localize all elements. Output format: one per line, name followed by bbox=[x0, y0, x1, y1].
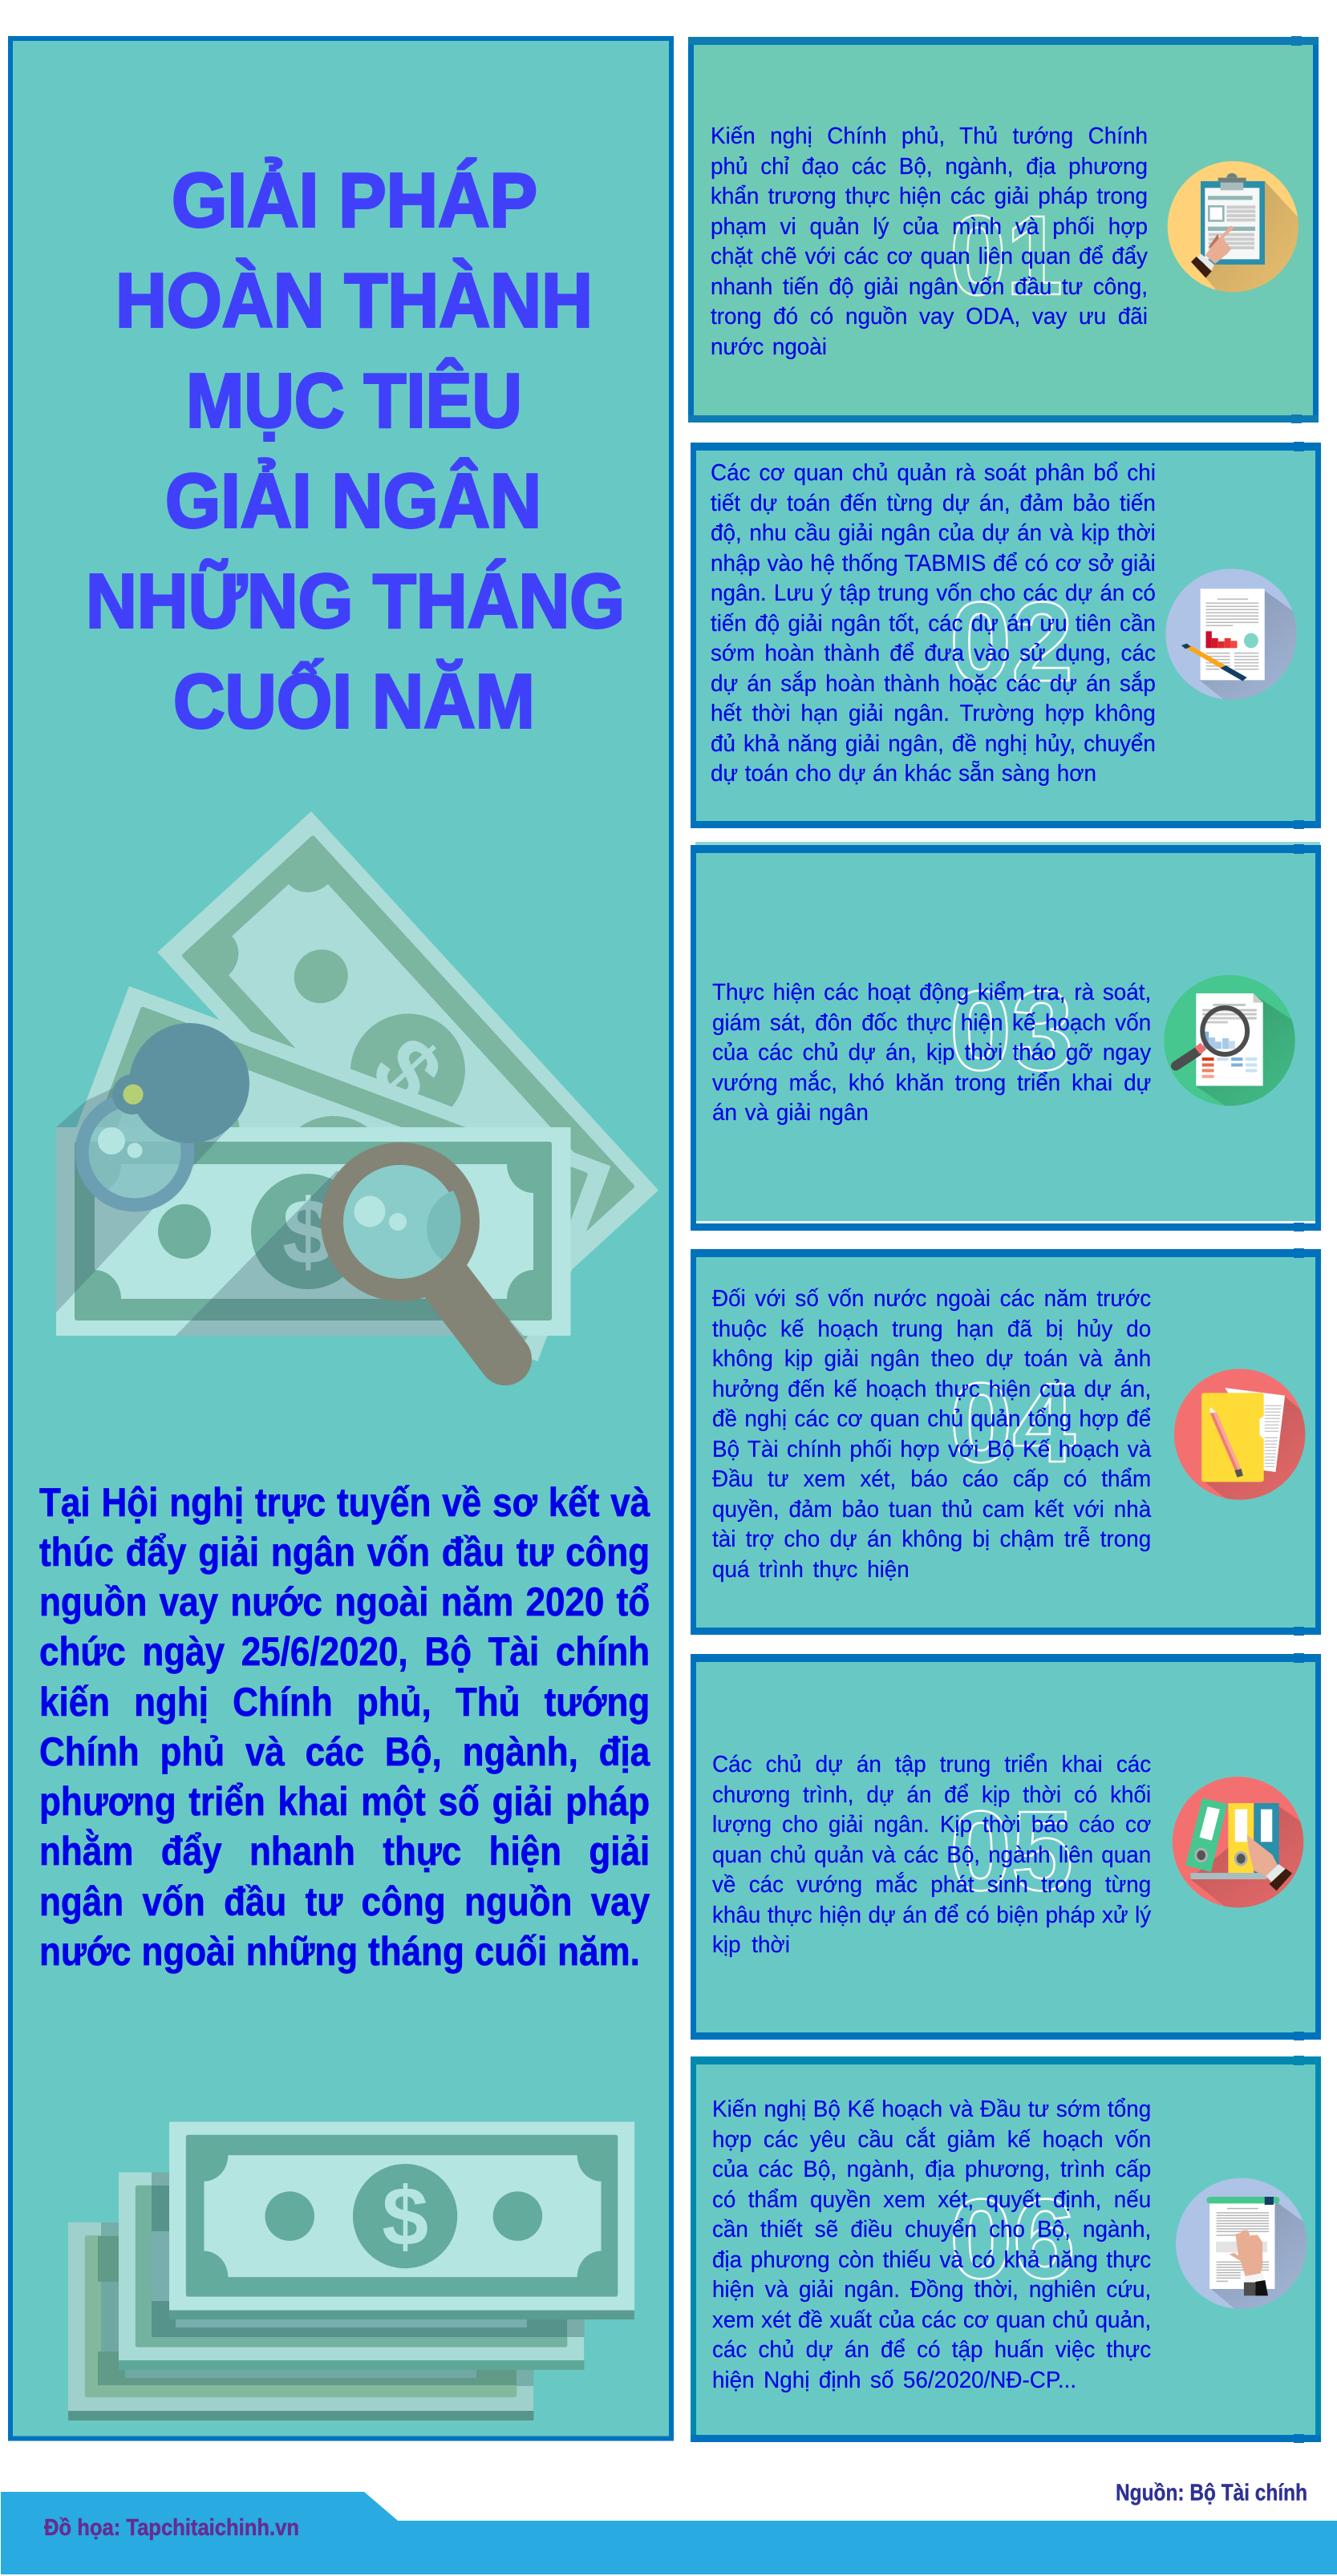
text block: intro: Tại Hội nghị trực tuyến về sơ kết và bbox=[39, 1480, 650, 1525]
panel: left column bbox=[8, 36, 674, 2441]
icon: binders on a shelf bbox=[1173, 1777, 1304, 1908]
title: CUỐI NĂM bbox=[173, 657, 535, 744]
text block: panel 01: Kiến nghị Chính phủ, Thủ tướng Chính bbox=[711, 123, 1148, 149]
banknote: rotated back bbox=[157, 811, 658, 1331]
text block: panel 05: quan chủ quản và các Bộ, ngành liên quan bbox=[712, 1842, 1151, 1868]
text block: intro: chức ngày 25/6/2020, Bộ Tài chính bbox=[39, 1629, 650, 1674]
banknote: rotated back: $ bbox=[352, 1018, 462, 1125]
text block: panel 02: nhập vào hệ thống TABMIS để có cơ sở giải bbox=[711, 550, 1156, 576]
text block: panel 03: vướng mắc, khó khăn trong triển khai dự bbox=[712, 1070, 1151, 1096]
panel: 02 bbox=[691, 442, 1337, 829]
text block: panel 01: nước ngoài bbox=[711, 334, 827, 360]
text block: intro: kiến nghị Chính phủ, Thủ tướng bbox=[39, 1680, 650, 1725]
text block: intro: nước ngoài những tháng cuối năm. bbox=[39, 1929, 640, 1974]
title: MỤC TIÊU bbox=[186, 358, 522, 444]
text block: panel 01: khẩn trương thực hiện các giải pháp trong bbox=[711, 184, 1148, 209]
banknote: rotated middle bbox=[56, 986, 610, 1361]
number 03: 03 bbox=[950, 967, 1073, 1094]
text block: panel 01: phủ chỉ đạo các Bộ, ngành, địa phương bbox=[711, 154, 1148, 180]
text block: panel 01: trong đó có nguồn vay ODA, vay ưu đãi bbox=[711, 304, 1148, 330]
text block: panel 06: hợp các yêu cầu cắt giảm kế hoạch vốn bbox=[712, 2127, 1151, 2153]
text block: panel 06 bbox=[712, 2097, 1151, 2393]
title: GIẢI NGÂN bbox=[165, 457, 541, 544]
banknote: front of stack bbox=[169, 2121, 634, 2319]
banknote: front of stack: $ bbox=[382, 2170, 428, 2263]
text block: panel 05: về các vướng mắc phát sinh trong từng bbox=[712, 1872, 1151, 1898]
text block: intro: ngân vốn đầu tư công nguồn vay bbox=[39, 1879, 650, 1924]
text block: panel 03: của các chủ dự án, kịp thời tháo gỡ ngay bbox=[712, 1040, 1151, 1066]
text block: panel 04 bbox=[712, 1286, 1152, 1583]
text block: panel 03: Thực hiện các hoạt động kiểm tra, rà soát, bbox=[712, 980, 1151, 1005]
title: NHỮNG THÁNG bbox=[86, 558, 625, 645]
number 01: 01 bbox=[950, 192, 1063, 318]
text block: panel 02: ngân. Lưu ý tập trung vốn cho các dự án có bbox=[711, 580, 1156, 606]
text block: panel 02: độ, nhu cầu giải ngân của dự án và kịp thời bbox=[711, 520, 1156, 546]
text block: intro: Chính phủ và các Bộ, ngành, địa bbox=[39, 1729, 650, 1774]
text block: intro: nhằm đẩy nhanh thực hiện giải bbox=[39, 1829, 650, 1874]
text block: panel 04: quyền, đảm bảo tuan thủ cam kết với nhà bbox=[712, 1496, 1151, 1522]
text block: panel 05: chương trình, dự án để kịp thời có khối bbox=[712, 1781, 1151, 1807]
banknote: front: $ bbox=[282, 1181, 334, 1284]
text block: panel 02 bbox=[711, 460, 1156, 787]
text block: panel 02: sớm hoàn thành để đưa vào sử dụng, các bbox=[711, 641, 1156, 666]
text block: panel 01 bbox=[711, 123, 1148, 360]
text block: intro bbox=[39, 1480, 650, 1974]
text block: panel 05: lượng cho giải ngân. Kịp thời báo cáo cơ bbox=[712, 1812, 1151, 1838]
icon: folder and pencil bbox=[1174, 1369, 1306, 1500]
text block: panel 06: có thẩm quyền xem xét, quyết định, nếu bbox=[712, 2187, 1151, 2213]
text block: panel 04: quá trình thực hiện bbox=[712, 1557, 910, 1583]
number 04: 04 bbox=[950, 1359, 1076, 1486]
panel: 03 bbox=[691, 842, 1337, 1231]
text block: panel 03: án và giải ngân bbox=[712, 1100, 869, 1126]
footer band bbox=[1, 2492, 1337, 2574]
text block: panel 03: giám sát, đôn đốc thực hiện kế hoạch vốn bbox=[712, 1010, 1151, 1036]
illustration: banknote stack bbox=[68, 2121, 634, 2420]
title bbox=[86, 157, 625, 744]
text block: panel 02: tiến độ giải ngân tốt, các dự án ưu tiên cần bbox=[711, 611, 1156, 637]
number 05: 05 bbox=[950, 1787, 1073, 1914]
banknote: back of stack bbox=[68, 2222, 534, 2420]
text block: panel 06: Kiến nghị Bộ Kế hoạch và Đầu tư sớm tổng bbox=[712, 2097, 1151, 2122]
icon: hand on document bbox=[1176, 2178, 1307, 2309]
illustration: banknotes with magnifiers bbox=[56, 811, 658, 1361]
panel: 01 bbox=[688, 36, 1337, 423]
banknote: rotated middle: $ bbox=[290, 1118, 375, 1231]
text block: panel 06: địa phương còn thiếu và có khả năng thực bbox=[712, 2247, 1151, 2273]
text block: panel 04: thuộc kế hoạch trung hạn đã bị hủy do bbox=[712, 1316, 1151, 1342]
text block: panel 04: Đối với số vốn nước ngoài các năm trước bbox=[712, 1286, 1151, 1312]
icon: small magnifier shadow bbox=[82, 1023, 249, 1205]
text block: panel 02: dự án sắp hoàn thành hoặc các dự án sắp bbox=[711, 670, 1156, 696]
text block: panel 05: Các chủ dự án tập trung triển khai các bbox=[712, 1752, 1151, 1777]
banknote: front bbox=[56, 1127, 571, 1336]
text block: intro: nguồn vay nước ngoài năm 2020 tổ bbox=[39, 1579, 650, 1624]
text block: panel 04: tài trợ cho dự án không bị chậm trễ trong bbox=[712, 1527, 1151, 1552]
text block: panel 01: nhanh tiến độ giải ngân vốn đầu tư công, bbox=[711, 274, 1148, 300]
icon: large magnifier bbox=[332, 1154, 505, 1359]
text block: panel 04: Bộ Tài chính phối hợp với Bộ Kế hoạch và bbox=[712, 1437, 1151, 1462]
text block: panel 04: hưởng đến kế hoạch thực hiện của dự án, bbox=[712, 1376, 1151, 1401]
text block: panel 01: phạm vi quản lý của mình và phối hợp bbox=[711, 214, 1148, 240]
panel: 04 bbox=[691, 1248, 1337, 1636]
icon: report and pencil bbox=[1165, 568, 1297, 700]
text block: panel 05: kịp thời bbox=[712, 1932, 790, 1958]
text block: panel 04: không kịp giải ngân theo dự toán và ảnh bbox=[712, 1346, 1151, 1372]
panel: 05 bbox=[691, 1653, 1337, 2040]
text block: panel 06: cần thiết sẽ điều chuyển cho Bộ, ngành, bbox=[712, 2217, 1151, 2242]
text block: intro: thúc đẩy giải ngân vốn đầu tư công bbox=[39, 1530, 650, 1575]
credit: source: Nguồn: Bộ Tài chính bbox=[1116, 2481, 1307, 2506]
text block: panel 03 bbox=[712, 980, 1152, 1126]
text block: intro: phương triển khai một số giải pháp bbox=[39, 1779, 650, 1824]
text block: panel 05: khâu thực hiện dự án để có biện pháp xử lý bbox=[712, 1902, 1151, 1927]
text block: panel 06: các chủ dự án để có tập huấn việc thực bbox=[712, 2337, 1151, 2363]
text block: panel 05 bbox=[712, 1752, 1152, 1958]
text block: panel 06: hiện Nghị định số 56/2020/NĐ-CP... bbox=[712, 2368, 1076, 2393]
icon: document under magnifier bbox=[1164, 975, 1295, 1106]
credit: graphics: Đồ họa: Tapchitaichinh.vn bbox=[44, 2515, 299, 2541]
text block: panel 06: xem xét đề xuất của các cơ quan chủ quản, bbox=[712, 2307, 1151, 2333]
title: HOÀN THÀNH bbox=[115, 258, 593, 343]
text block: panel 04: đề nghị các cơ quan chủ quản tổng hợp để bbox=[712, 1406, 1151, 1432]
banknote: middle of stack bbox=[119, 2173, 584, 2370]
text block: panel 02: hết thời hạn giải ngân. Trường hợp không bbox=[711, 701, 1156, 726]
text block: panel 02: dự toán cho dự án khác sẵn sàng hơn bbox=[711, 761, 1096, 787]
text block: panel 06: của các Bộ, ngành, địa phương, trình cấp bbox=[712, 2157, 1151, 2182]
text block: panel 04: Đầu tư xem xét, báo cáo cấp có thẩm bbox=[712, 1466, 1151, 1492]
text block: panel 06: hiện và giải ngân. Đồng thời, nghiên cứu, bbox=[712, 2277, 1151, 2303]
title: GIẢI PHÁP bbox=[172, 157, 537, 244]
number 02: 02 bbox=[950, 578, 1073, 705]
text block: panel 02: tiết dự toán đến từng dự án, đảm bảo tiến bbox=[711, 491, 1156, 516]
text block: panel 02: Các cơ quan chủ quản rà soát phân bổ chi bbox=[711, 460, 1156, 486]
number 06: 06 bbox=[950, 2175, 1076, 2302]
panel: 06 bbox=[691, 2056, 1337, 2443]
text block: panel 01: chặt chẽ với các cơ quan liên quan để đẩy bbox=[711, 244, 1148, 269]
text block: panel 02: đủ khả năng giải ngân, đề nghị hủy, chuyển bbox=[711, 731, 1156, 757]
icon: clipboard bbox=[1168, 161, 1299, 292]
